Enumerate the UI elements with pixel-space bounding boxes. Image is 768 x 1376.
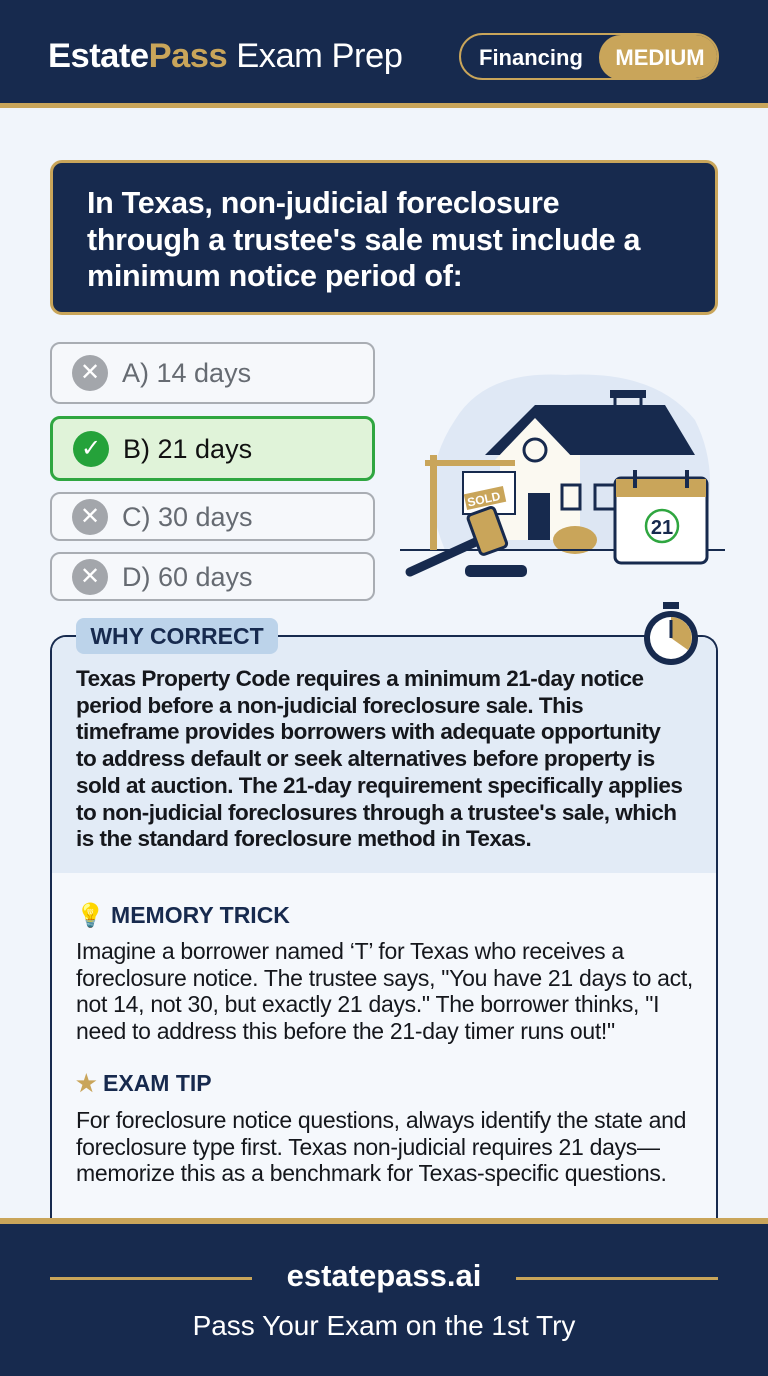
footer url: estatepass.ai: [287, 1258, 481, 1293]
option B correct: ✓: [81, 435, 101, 462]
text: memory trick: need to address this before the 21-day timer runs out!": [76, 1018, 615, 1044]
text: why correct explanation: is the standard foreclosure method in Texas.: [76, 826, 531, 851]
label: why correct tab: WHY CORRECT: [90, 623, 264, 649]
text: why correct explanation: timeframe provides borrowers with adequate opportunity: [76, 719, 660, 744]
footer: [0, 1218, 768, 1376]
option B correct: [50, 416, 375, 481]
text: exam tip: memorize this as a benchmark for Texas-specific questions.: [76, 1160, 667, 1186]
pill: category and difficulty: Financing: [479, 45, 583, 70]
text: exam tip: For foreclosure notice questions, always identify the state and: [76, 1107, 686, 1133]
pill: category and difficulty: MEDIUM: [615, 45, 705, 70]
question box: [50, 160, 718, 315]
text: memory trick: Imagine a borrower named ‘T’ for Texas who receives a: [76, 938, 624, 964]
heading: exam tip: ★ EXAM TIP: [76, 1070, 212, 1096]
text: why correct explanation: Texas Property Code requires a minimum 21-day notice: [76, 666, 644, 691]
question box: In Texas, non-judicial foreclosure: [87, 186, 559, 220]
pill: category and difficulty: [459, 33, 719, 80]
option C: ✕: [80, 503, 100, 530]
option D: ✕: [80, 563, 100, 590]
option A: [50, 342, 375, 404]
option A: ✕: [80, 359, 100, 386]
title: EstatePass Exam Prep: [48, 37, 402, 75]
text: exam tip: foreclosure type first. Texas non-judicial requires 21 days—: [76, 1134, 660, 1160]
option C: [50, 492, 375, 541]
header bar: [0, 0, 768, 108]
heading: memory trick: 💡 MEMORY TRICK: [76, 902, 290, 928]
panel: why correct: [50, 635, 718, 1235]
illustration: house, sold sign, gavel, calendar: SOLD: [466, 489, 502, 510]
text: why correct explanation: [76, 666, 682, 851]
footer tagline: Pass Your Exam on the 1st Try: [193, 1310, 575, 1341]
option A: A) 14 days: [122, 358, 251, 388]
text: why correct explanation: sold at auction. The 21-day requirement specifically applies: [76, 773, 682, 798]
text: memory trick: foreclosure notice. The trustee says, "You have 21 days to act,: [76, 965, 693, 991]
option D: D) 60 days: [122, 562, 253, 592]
question box: minimum notice period of:: [87, 259, 462, 293]
illustration: house, sold sign, gavel, calendar: [400, 374, 725, 577]
option B correct: B) 21 days: [123, 434, 252, 464]
option D: [50, 552, 375, 601]
illustration: house, sold sign, gavel, calendar: 21: [651, 517, 673, 539]
text: memory trick: [76, 938, 693, 1044]
text: why correct explanation: to non-judicial foreclosures through a trustee's sale, which: [76, 800, 676, 825]
question box: through a trustee's sale must include a: [87, 222, 640, 256]
label: why correct tab: [76, 618, 278, 654]
icon: stopwatch: [644, 602, 698, 665]
option C: C) 30 days: [122, 502, 253, 532]
text: why correct explanation: period before a non-judicial foreclosure sale. This: [76, 693, 583, 718]
text: memory trick: not 14, not 30, but exactly 21 days." The borrower thinks, "I: [76, 991, 659, 1017]
text: why correct explanation: to address default or seek alternatives before property is: [76, 746, 655, 771]
text: exam tip: [76, 1107, 686, 1186]
